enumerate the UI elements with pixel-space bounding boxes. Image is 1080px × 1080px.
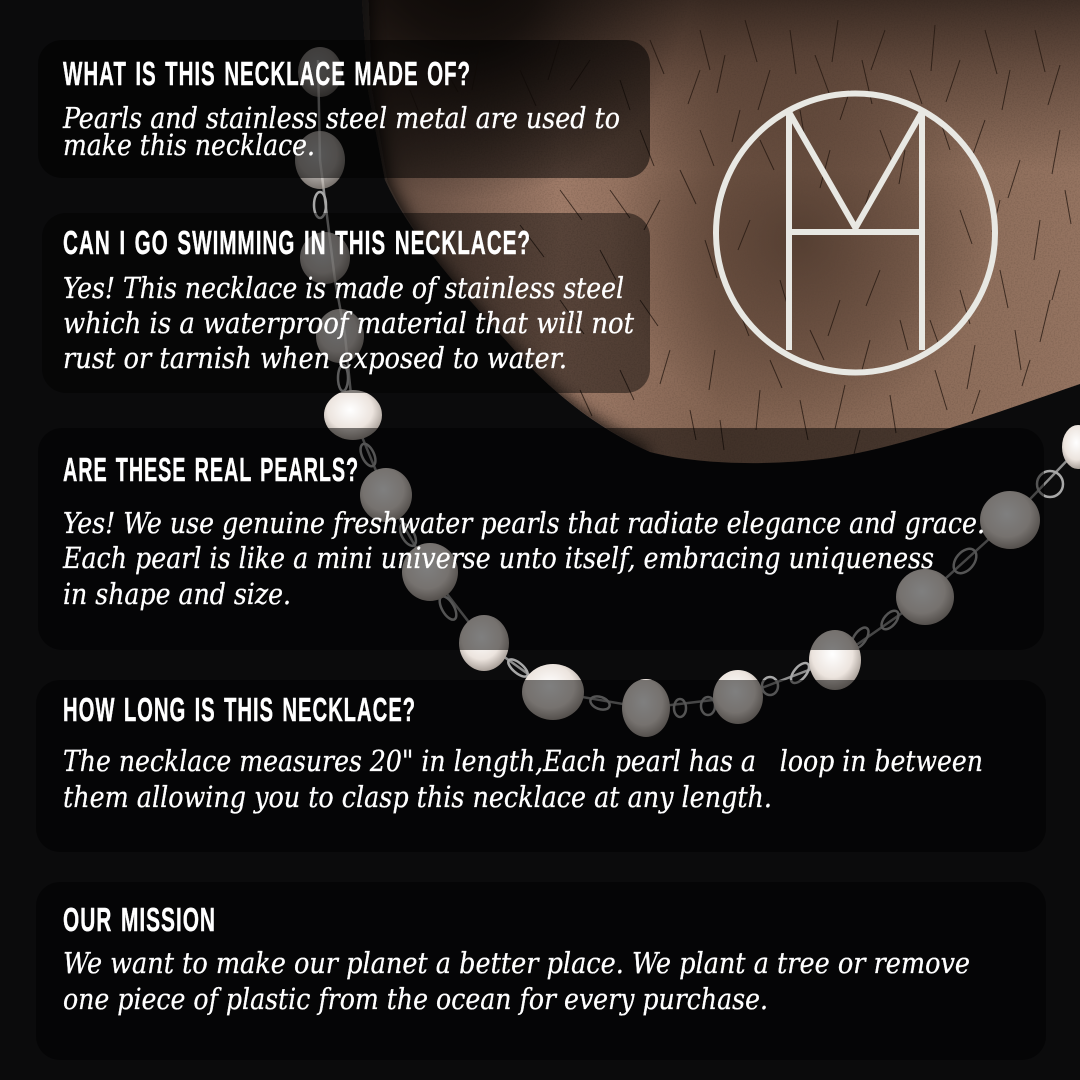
panel: what is it made of [38, 40, 650, 178]
background: photo of neck and black shirt [362, 0, 1080, 464]
answer: Yes! We use genuine freshwater pearls that radiate elegance and grace. [63, 506, 985, 540]
text block: what is this necklace made of [62, 55, 620, 162]
answer: rust or tarnish when exposed to water. [63, 341, 567, 375]
answer: Pearls and stainless steel metal are used to [62, 101, 620, 135]
answer [63, 271, 635, 375]
text block: are these real pearls [62, 451, 985, 611]
panel: real pearls [38, 428, 1044, 650]
answer: them allowing you to clasp this necklace at any length. [63, 780, 772, 814]
chain links [314, 192, 1063, 717]
panel: mission [36, 882, 1046, 1060]
soft shadow edge of neck [358, 0, 645, 460]
panel: swimming [42, 213, 650, 393]
heading: ARE THESE REAL PEARLS? [63, 451, 359, 488]
heading: WHAT IS THIS NECKLACE MADE OF? [63, 55, 471, 92]
answer: We want to make our planet a better place. We plant a tree or remove [63, 946, 970, 980]
answer: one piece of plastic from the ocean for every purchase. [63, 982, 768, 1016]
heading: HOW LONG IS THIS NECKLACE? [63, 691, 416, 728]
answer: in shape and size. [63, 577, 291, 611]
answer: Yes! This necklace is made of stainless steel [63, 271, 624, 305]
answer [62, 101, 620, 162]
text block: can I go swimming [63, 224, 635, 375]
pearls [295, 47, 1080, 737]
heading: CAN I GO SWIMMING IN THIS NECKLACE? [63, 224, 531, 261]
logo: circled MH monogram [716, 94, 995, 372]
answer [63, 946, 970, 1016]
answer: Each pearl is like a mini universe unto itself, embracing uniqueness [62, 541, 934, 575]
answer: make this necklace. [63, 128, 315, 162]
necklace chain [318, 60, 1080, 708]
panel: length [36, 680, 1046, 852]
heading: OUR MISSION [63, 901, 216, 938]
text block: our mission [63, 901, 970, 1016]
answer [62, 506, 985, 611]
answer: which is a waterproof material that will not [63, 306, 635, 340]
answer [63, 744, 983, 814]
text block: how long is this necklace [63, 691, 983, 814]
answer: The necklace measures 20" in length,Each pearl has a loop in between [63, 744, 983, 778]
